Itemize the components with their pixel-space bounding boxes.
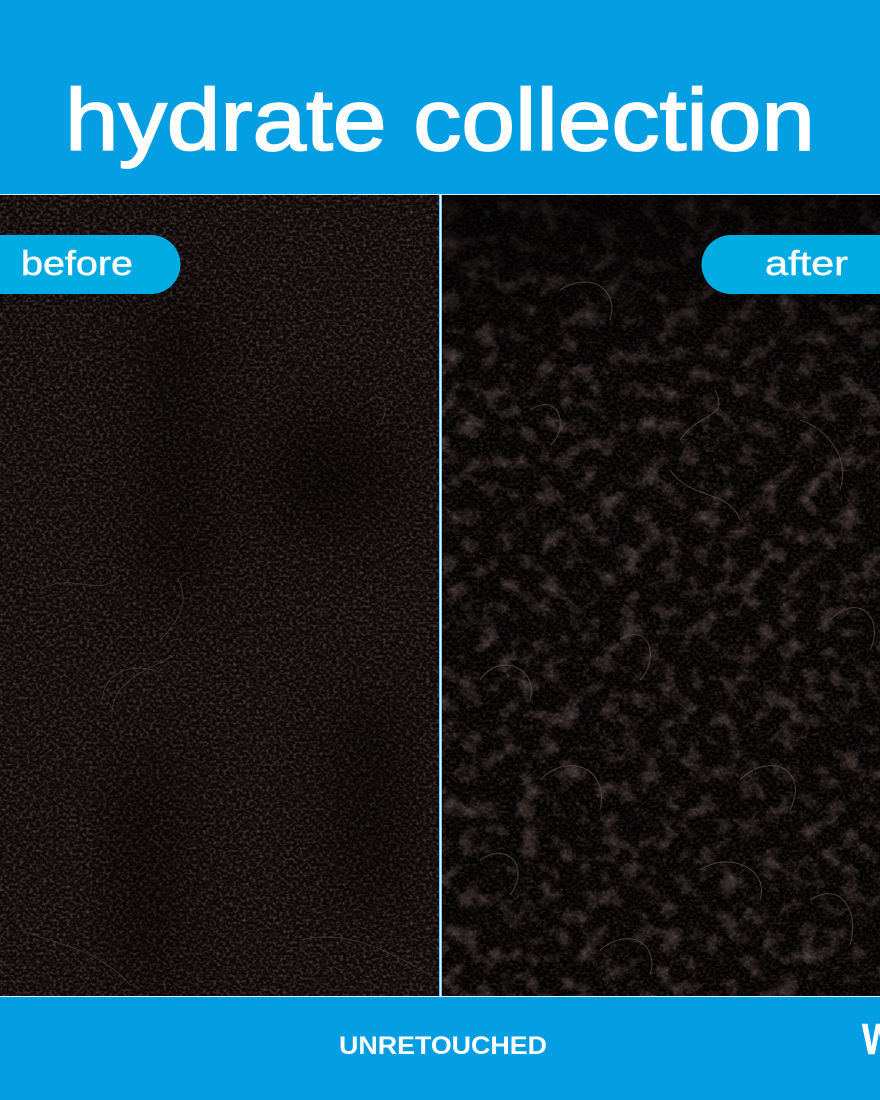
header band bbox=[0, 0, 880, 194]
after label: after bbox=[765, 245, 848, 283]
before label bbox=[0, 235, 180, 294]
before label: before bbox=[21, 245, 133, 283]
divider lines bbox=[0, 194, 880, 997]
after label bbox=[702, 235, 880, 294]
footer band bbox=[0, 997, 880, 1100]
photo panel: after bbox=[442, 195, 880, 996]
photo panel: before bbox=[0, 195, 439, 996]
unretouched note: UNRETOUCHED bbox=[339, 1032, 547, 1060]
title: hydrate collection bbox=[65, 72, 815, 169]
